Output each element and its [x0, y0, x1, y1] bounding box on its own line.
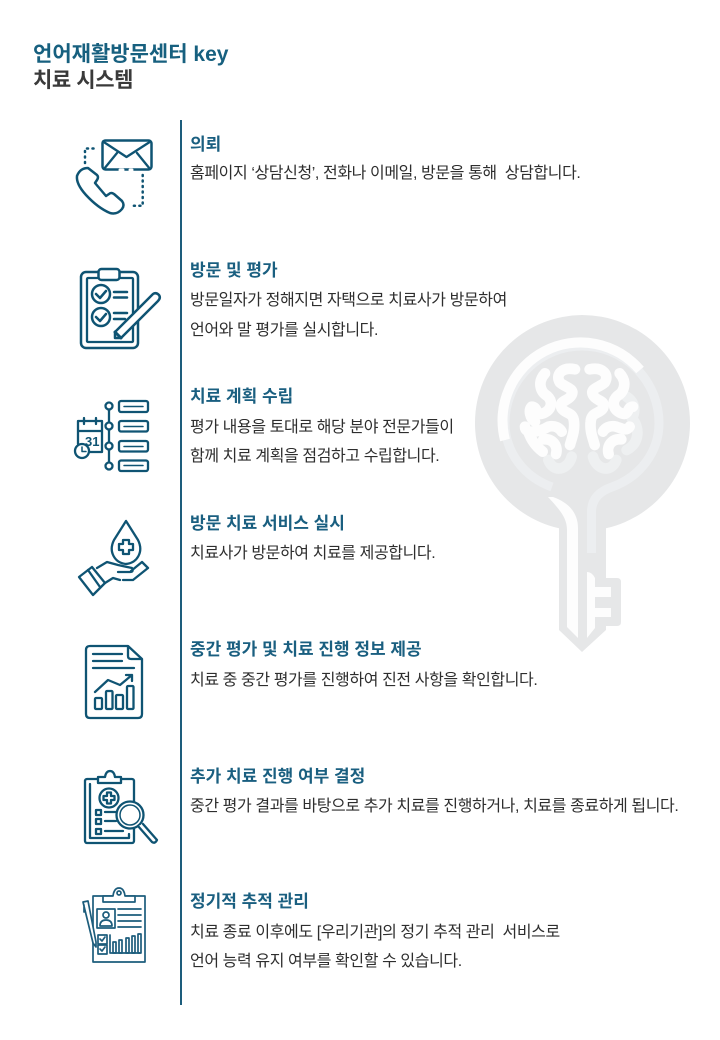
- step 1: 의뢰: 홈페이지 ‘상담신청’, 전화나 이메일, 방문을 통해 상담합니다.: [190, 165, 580, 182]
- step 3: 치료 계획 수립: [190, 387, 454, 465]
- step 7: 정기적 추적 관리: 언어 능력 유지 여부를 확인할 수 있습니다.: [190, 953, 462, 970]
- icon: patient record clipboard with pen: [83, 888, 145, 962]
- brain: [525, 369, 637, 468]
- step 6: 추가 치료 진행 여부 결정: [190, 767, 678, 815]
- watermark: brain key: [475, 315, 690, 652]
- step 2: 방문 및 평가: [190, 261, 507, 339]
- icon: medical clipboard with magnifier: [85, 771, 157, 843]
- step 6: 추가 치료 진행 여부 결정: 추가 치료 진행 여부 결정: [190, 767, 365, 786]
- step 7: 정기적 추적 관리: 정기적 추적 관리: [190, 892, 309, 911]
- step 5: 중간 평가 및 치료 진행 정보 제공: 치료 중 중간 평가를 진행하여 진전 사항을 확인합니다.: [190, 672, 537, 689]
- step 7: 정기적 추적 관리: 치료 종료 이후에도 [우리기관]의 정기 추적 관리 서비스로: [190, 924, 560, 941]
- step 4: 방문 치료 서비스 실시: 치료사가 방문하여 치료를 제공합니다.: [190, 545, 435, 562]
- step 3: 치료 계획 수립: 평가 내용을 토대로 해당 분야 전문가들이: [190, 419, 454, 436]
- title: 언어재활방문센터 key: [33, 43, 228, 66]
- step 2: 방문 및 평가: 언어와 말 평가를 실시합니다.: [190, 322, 378, 339]
- icon: calendar timeline: [75, 401, 148, 471]
- icon: envelope and phone: [77, 140, 152, 214]
- step 4: 방문 치료 서비스 실시: 방문 치료 서비스 실시: [190, 514, 345, 533]
- title: [33, 43, 228, 92]
- step 2: 방문 및 평가: 방문 및 평가: [190, 261, 278, 280]
- step 1: 의뢰: [190, 135, 580, 182]
- step 2: 방문 및 평가: 방문일자가 정해지면 자택으로 치료사가 방문하여: [190, 292, 507, 309]
- step 3: 치료 계획 수립: 함께 치료 계획을 점검하고 수립합니다.: [190, 448, 439, 465]
- step 5: 중간 평가 및 치료 진행 정보 제공: [190, 640, 537, 689]
- step 1: 의뢰: 의뢰: [190, 135, 221, 154]
- icon: report document with chart: [86, 646, 142, 718]
- step 4: 방문 치료 서비스 실시: [190, 514, 435, 562]
- step 5: 중간 평가 및 치료 진행 정보 제공: 중간 평가 및 치료 진행 정보 제공: [190, 640, 422, 659]
- icon: hand holding medical drop: [79, 521, 148, 595]
- icon: clipboard checklist with pencil: [81, 269, 160, 348]
- step 7: 정기적 추적 관리: [190, 892, 560, 970]
- step 6: 추가 치료 진행 여부 결정: 중간 평가 결과를 바탕으로 추가 치료를 진행하거나, 치료를 종료하게 됩니다.: [190, 798, 678, 815]
- vertical timeline line: [180, 120, 182, 1005]
- title: 치료 시스템: [33, 69, 133, 92]
- icon: calendar timeline: 31: [85, 434, 99, 449]
- step 3: 치료 계획 수립: 치료 계획 수립: [190, 387, 293, 406]
